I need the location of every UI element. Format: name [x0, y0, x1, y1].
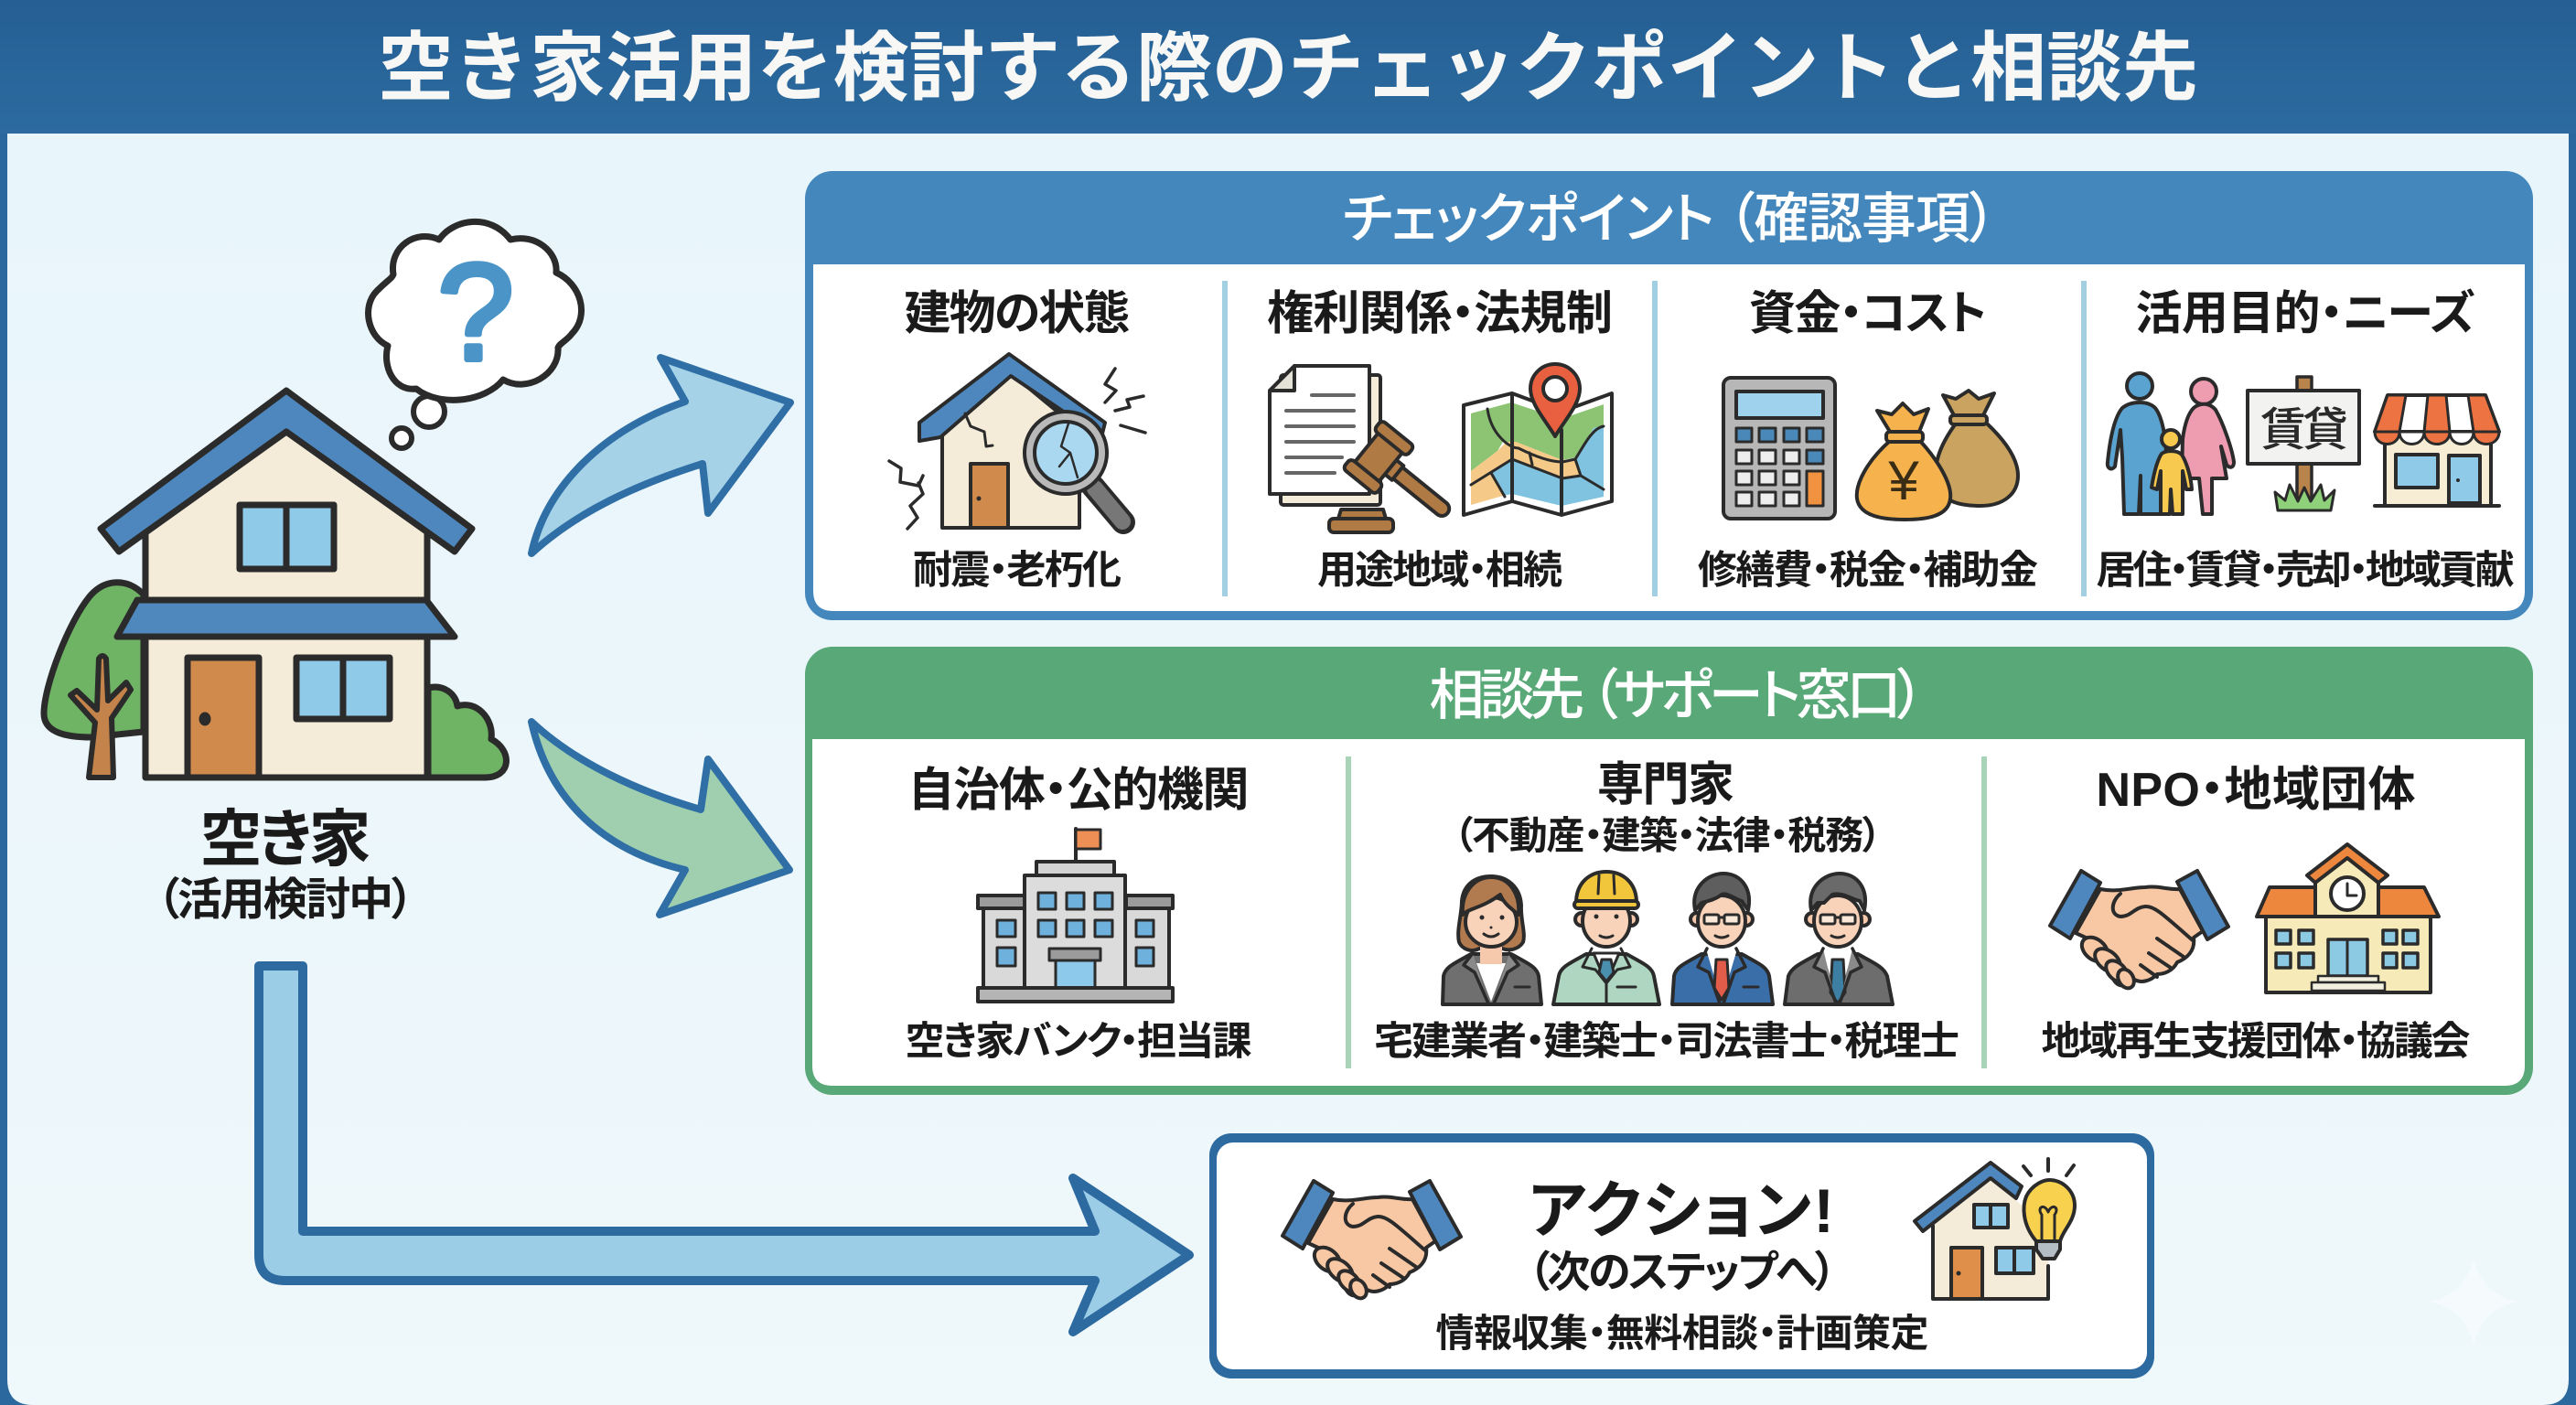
- icon: documents and gavel: [1270, 366, 1467, 537]
- icon: action handshake: [1283, 1181, 1461, 1302]
- panel heading: consultation contacts: 相談先 （サポート窓口）: [1429, 665, 1925, 726]
- thought bubble with question mark: ?: [437, 235, 514, 389]
- column: NPOs and community groups: NPO・地域団体: [2097, 764, 2415, 817]
- label: empty house: [157, 805, 413, 925]
- column: building condition: 耐震・老朽化: [913, 549, 1122, 593]
- icon: lower window: [296, 658, 390, 719]
- column: funds and cost: 修繕費・税金・補助金: [1698, 549, 2038, 593]
- title banner: 空き家活用を検討する際のチェックポイントと相談先: [378, 26, 2198, 111]
- column: purpose and needs: 活用目的・ニーズ: [2135, 287, 2475, 339]
- arrow to checkpoints: [531, 358, 790, 553]
- icon: woman in suit: [1443, 876, 1541, 1004]
- arrow to consultation: [531, 722, 789, 915]
- column: NPOs and community groups: 地域再生支援団体・協議会: [2042, 1020, 2470, 1064]
- panel heading: checkpoints: チェックポイント （確認事項）: [1343, 188, 1996, 250]
- label: empty house: （活用検討中）: [157, 875, 413, 925]
- column: building condition: 建物の状態: [904, 287, 1131, 339]
- icon: shop: [2375, 395, 2499, 506]
- icon: community school building: [2257, 844, 2439, 992]
- title banner: [0, 0, 2576, 134]
- panel: checkpoints: [805, 171, 2533, 620]
- icon: rental sign: [2248, 377, 2359, 510]
- icon: house walls: [145, 430, 427, 778]
- thought bubble with question mark: [369, 221, 582, 448]
- icon: house with light bulb: [1915, 1159, 2075, 1299]
- icon: zoning map with pin: [1464, 364, 1612, 515]
- icon: lawyer in blue suit: [1672, 874, 1773, 1004]
- column: purpose and needs: 居住・賃貸・売却・地域貢献: [2097, 549, 2514, 593]
- label: empty house: 空き家: [199, 805, 371, 874]
- icon: money bags: [1857, 391, 2018, 520]
- icon: upper window: [240, 505, 334, 569]
- column: specialists: [1374, 758, 1959, 1064]
- icon: tax accountant in grey suit: [1785, 874, 1893, 1004]
- column: rights and regulations: [1267, 287, 1613, 593]
- icon: lower eave: [117, 600, 455, 637]
- column: municipalities: 空き家バンク・担当課: [906, 1020, 1251, 1064]
- icon: four specialists: [1443, 872, 1893, 1004]
- icon: tree: [44, 583, 144, 778]
- icon: rental sign: 賃貸: [2260, 404, 2348, 456]
- action summary: 情報収集・無料相談・計画策定: [1436, 1312, 1928, 1355]
- action heading: アクション!: [1529, 1176, 1834, 1246]
- icon: main roof: [101, 391, 472, 552]
- panel: consultation contacts: [805, 647, 2533, 1095]
- icon: government building: [978, 829, 1173, 1002]
- icon: calculator: [1723, 378, 1835, 519]
- column: funds and cost: [1698, 287, 2038, 593]
- empty house illustration: [44, 391, 506, 778]
- column: purpose and needs: [2097, 287, 2514, 593]
- icon: bush: [428, 687, 506, 778]
- column: rights and regulations: 権利関係・法規制: [1267, 287, 1613, 339]
- column: funds and cost: 資金・コスト: [1749, 287, 1987, 339]
- icon: money bags: ¥: [1887, 450, 1919, 511]
- column: building condition: [889, 287, 1145, 593]
- icon: cracked house with magnifier: [889, 354, 1145, 529]
- icon: handshake: [2050, 871, 2228, 992]
- column: municipalities: 自治体・公的機関: [907, 764, 1250, 816]
- column: specialists: 宅建業者・建築士・司法書士・税理士: [1374, 1020, 1959, 1064]
- column: specialists: 専門家: [1597, 758, 1734, 810]
- icon: builder with helmet: [1553, 872, 1659, 1004]
- panel: action: [1209, 1133, 2154, 1378]
- column: NPOs and community groups: [2042, 764, 2470, 1064]
- column: municipalities: [906, 764, 1251, 1064]
- column: rights and regulations: 用途地域・相続: [1317, 549, 1562, 593]
- icon: door: [188, 658, 259, 778]
- arrow to action: [259, 966, 1189, 1332]
- icon: family: [2108, 373, 2234, 514]
- column: specialists: （不動産・建築・法律・税務）: [1454, 814, 1882, 857]
- action subheading: （次のステップへ）: [1528, 1248, 1837, 1296]
